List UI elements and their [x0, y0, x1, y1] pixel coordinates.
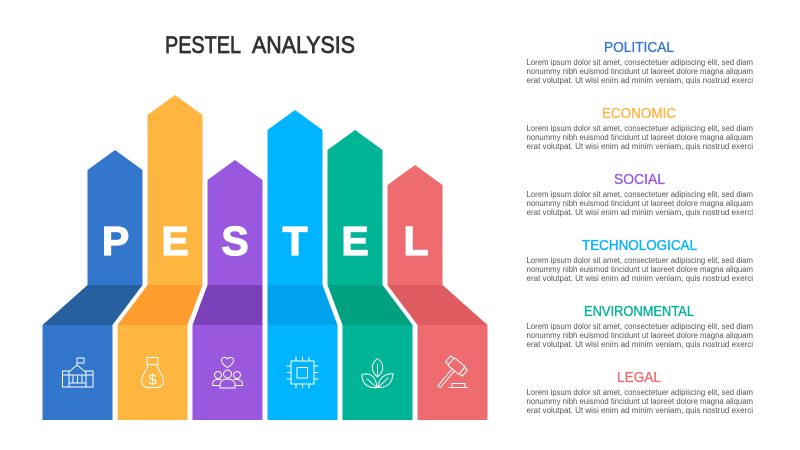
description: technological: nonummy nibh euismod tincidunt ut laoreet dolore magna aliquam: [526, 265, 753, 274]
column: technological: T: [282, 218, 308, 264]
column: social: S: [221, 218, 249, 264]
heading: legal: LEGAL: [617, 369, 661, 386]
heading: social: SOCIAL: [614, 171, 665, 188]
description: economic: [526, 124, 753, 151]
text block: environmental: [526, 303, 753, 349]
description: environmental: erat volutpat. Ut wisi enim ad minim veniam, quis nostrud exerci: [526, 340, 753, 349]
icon: government building: [62, 358, 93, 387]
title: [165, 32, 355, 59]
icon: microchip: [287, 357, 318, 388]
text block: social: [526, 171, 753, 217]
description: economic: nonummy nibh euismod tincidunt ut laoreet dolore magna aliquam: [526, 133, 753, 142]
text block: legal: [526, 369, 753, 415]
description: social: nonummy nibh euismod tincidunt ut laoreet dolore magna aliquam: [526, 199, 753, 208]
column: social: [192, 160, 262, 420]
description: environmental: nonummy nibh euismod tincidunt ut laoreet dolore magna aliquam: [526, 331, 753, 340]
column: economic: E: [161, 218, 189, 264]
description: technological: [526, 256, 753, 283]
icon: money bag: [142, 358, 164, 388]
column: political: [42, 150, 142, 420]
description: legal: [526, 388, 753, 415]
column: environmental: [328, 130, 412, 420]
description: economic: erat volutpat. Ut wisi enim ad minim veniam, quis nostrud exerci: [526, 142, 753, 151]
heading: technological: TECHNOLOGICAL: [582, 237, 697, 254]
text block: technological: [526, 237, 753, 283]
description: social: erat volutpat. Ut wisi enim ad minim veniam, quis nostrud exerci: [526, 208, 753, 217]
icon: leaves: [362, 358, 393, 388]
description: political: Lorem ipsum dolor sit amet, consectetuer adipiscing elit, sed diam: [526, 58, 753, 67]
heading: political: POLITICAL: [604, 39, 674, 56]
column: environmental: E: [341, 218, 369, 264]
description: environmental: Lorem ipsum dolor sit amet, consectetuer adipiscing elit, sed diam: [526, 322, 753, 331]
column: economic: [118, 95, 202, 420]
title: PESTEL: [165, 32, 241, 59]
text block: political: [526, 39, 753, 85]
heading: environmental: ENVIRONMENTAL: [584, 303, 694, 320]
description: legal: erat volutpat. Ut wisi enim ad minim veniam, quis nostrud exerci: [526, 406, 753, 415]
icon: money bag: $: [148, 372, 157, 388]
description: legal: Lorem ipsum dolor sit amet, consectetuer adipiscing elit, sed diam: [526, 388, 753, 397]
icon: gavel: [431, 355, 468, 394]
column: legal: L: [403, 218, 429, 264]
column: legal: [388, 165, 488, 420]
description: political: erat volutpat. Ut wisi enim ad minim veniam, quis nostrud exerci: [526, 76, 753, 85]
column: political: P: [102, 218, 129, 264]
description: economic: Lorem ipsum dolor sit amet, consectetuer adipiscing elit, sed diam: [526, 124, 753, 133]
title: ANALYSIS: [252, 32, 355, 59]
description: environmental: [526, 322, 753, 349]
description: political: [526, 58, 753, 85]
column: technological: [268, 110, 338, 420]
text block: economic: [526, 105, 753, 151]
description: legal: nonummy nibh euismod tincidunt ut laoreet dolore magna aliquam: [526, 397, 753, 406]
heading: economic: ECONOMIC: [602, 105, 676, 122]
icon: people with heart: [212, 357, 242, 388]
description: technological: Lorem ipsum dolor sit amet, consectetuer adipiscing elit, sed diam: [526, 256, 753, 265]
description: political: nonummy nibh euismod tincidunt ut laoreet dolore magna aliquam: [526, 67, 753, 76]
description: social: Lorem ipsum dolor sit amet, consectetuer adipiscing elit, sed diam: [526, 190, 753, 199]
description: technological: erat volutpat. Ut wisi enim ad minim veniam, quis nostrud exerci: [526, 274, 753, 283]
description: social: [526, 190, 753, 217]
